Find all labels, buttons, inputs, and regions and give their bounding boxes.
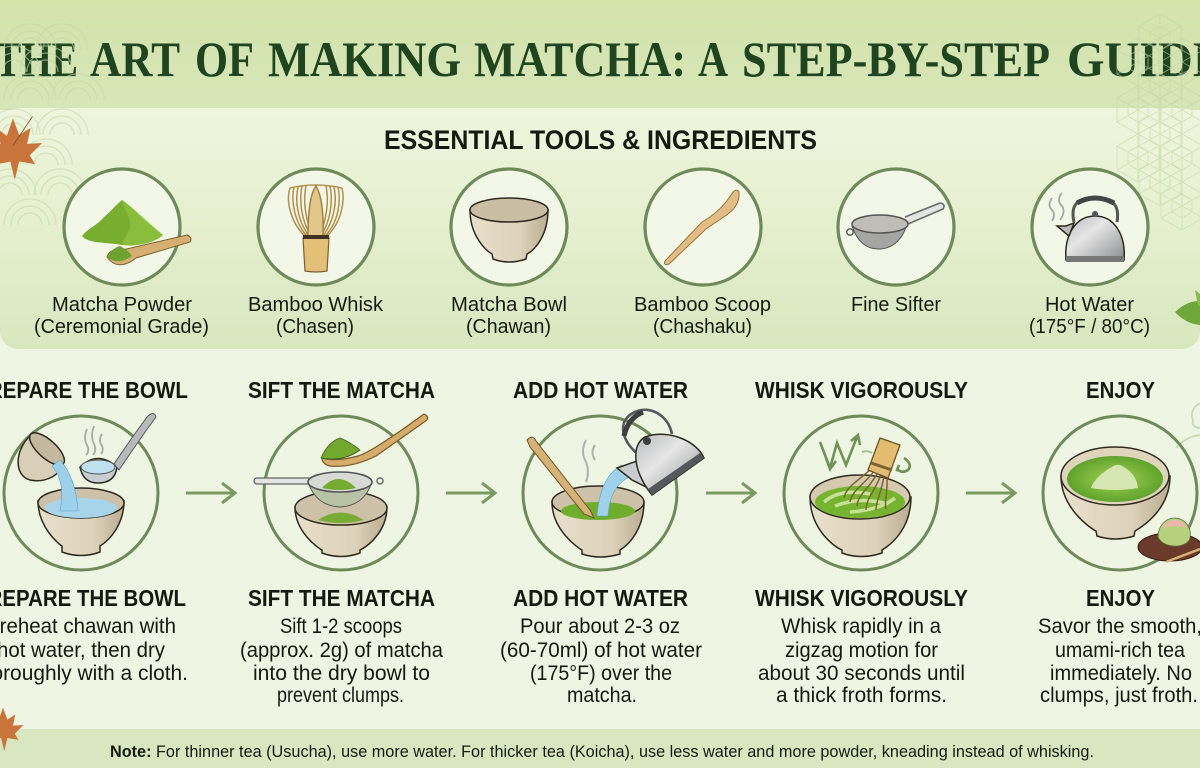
tool: matcha bowl: (Chawan) (466, 315, 551, 338)
step text (1038, 615, 1200, 707)
circle frame (451, 169, 567, 285)
step 1: prepare the bowl (0, 377, 188, 685)
arrow (186, 483, 235, 503)
header band (0, 0, 1200, 110)
scoop (664, 190, 739, 265)
circle frame (64, 169, 180, 285)
step subtitle: WHISK VIGOROUSLY (755, 585, 968, 611)
label: Fine Sifter (851, 293, 941, 316)
step text: Pour about 2-3 oz (520, 615, 680, 638)
powder mound (82, 200, 163, 245)
step text: Sift 1-2 scoops (280, 615, 402, 638)
step text: Whisk rapidly in a (781, 615, 941, 638)
decorative swirl right (1176, 403, 1200, 448)
tool: matcha bowl (451, 169, 567, 338)
tool: fine sifter (838, 169, 954, 316)
circle frame (645, 169, 761, 285)
tool: bamboo whisk: (Chasen) (276, 315, 354, 338)
step 4: whisk vigorously (755, 377, 968, 707)
step text: a thick froth forms. (776, 684, 947, 707)
circle frame (1032, 169, 1148, 285)
step 5: enjoy (1038, 377, 1200, 707)
step illustration (4, 414, 158, 570)
tool: bamboo scoop: (Chashaku) (653, 315, 752, 338)
label: Matcha Bowl (451, 293, 567, 316)
step text: (175°F) over the (530, 662, 672, 685)
decorative geometric pattern right (1117, 14, 1200, 230)
step title: ADD HOT WATER (513, 377, 688, 403)
arrow (446, 483, 495, 503)
step title: ENJOY (1086, 377, 1155, 403)
step text: prevent clumps. (277, 684, 404, 707)
step text: immediately. No (1050, 662, 1192, 685)
icon: maple leaf top (0, 117, 42, 180)
title: A (698, 31, 728, 87)
step text: (60-70ml) of hot water (500, 639, 702, 662)
scoop with powder (107, 235, 191, 265)
step text: clumps, just froth. (1040, 684, 1198, 707)
step 3: add hot water (500, 377, 704, 707)
label: Bamboo Scoop (634, 293, 771, 316)
step text: zigzag motion for (785, 639, 938, 662)
arrow (966, 483, 1015, 503)
step text: about 30 seconds until (758, 662, 965, 685)
bowl (470, 210, 548, 262)
tool: hot water kettle (1029, 169, 1150, 338)
tool: matcha powder (34, 169, 209, 338)
arrow (706, 483, 755, 503)
step subtitle: ADD HOT WATER (513, 585, 688, 611)
icon: green leaf right (1175, 290, 1200, 325)
step illustration (784, 416, 938, 570)
step text: matcha. (567, 684, 637, 707)
step text (0, 615, 188, 685)
sifter (905, 203, 944, 224)
step text: umami-rich tea (1055, 639, 1185, 662)
title: OF (195, 31, 254, 87)
title (0, 31, 1200, 87)
tool: hot water kettle: (175°F / 80°C) (1029, 315, 1150, 338)
step text (500, 615, 702, 707)
kettle (1073, 198, 1118, 222)
circle frame (838, 169, 954, 285)
step text (758, 615, 965, 707)
step text: hot water, then dry (0, 639, 165, 662)
step text: into the dry bowl to (253, 662, 430, 685)
tool: matcha powder: (Ceremonial Grade) (34, 315, 209, 338)
label: Matcha Powder (52, 293, 192, 316)
whisk (289, 185, 343, 236)
decorative wave pattern left (0, 24, 104, 225)
tool: bamboo whisk (248, 169, 384, 338)
note band (0, 729, 1200, 768)
steps background (0, 300, 1200, 740)
step illustration (1043, 416, 1200, 570)
title: STEP-BY-STEP (742, 31, 1050, 87)
circle frame (258, 169, 374, 285)
heading: essential tools: ESSENTIAL TOOLS & INGREDIENTS (384, 125, 817, 155)
label: Hot Water (1045, 293, 1134, 316)
title: ART (90, 31, 180, 87)
note text: Note: For thinner tea (Usucha), use more water. For thicker tea (Koicha), use less water and more powder, kneading instead of whisking. (110, 743, 1094, 761)
step text (240, 615, 443, 707)
step illustration (254, 414, 428, 570)
icon: maple leaf bottom (0, 708, 23, 751)
step 2: sift the matcha (240, 377, 443, 707)
step illustration (523, 410, 704, 570)
step subtitle: SIFT THE MATCHA (248, 585, 435, 611)
title: MATCHA: (474, 31, 686, 87)
tool: bamboo scoop (634, 169, 771, 338)
step text: (approx. 2g) of matcha (240, 639, 443, 662)
title: MAKING (268, 31, 461, 87)
step title: WHISK VIGOROUSLY (755, 377, 968, 403)
step title: SIFT THE MATCHA (248, 377, 435, 403)
label: Bamboo Whisk (248, 293, 384, 316)
step subtitle: ENJOY (1086, 585, 1155, 611)
